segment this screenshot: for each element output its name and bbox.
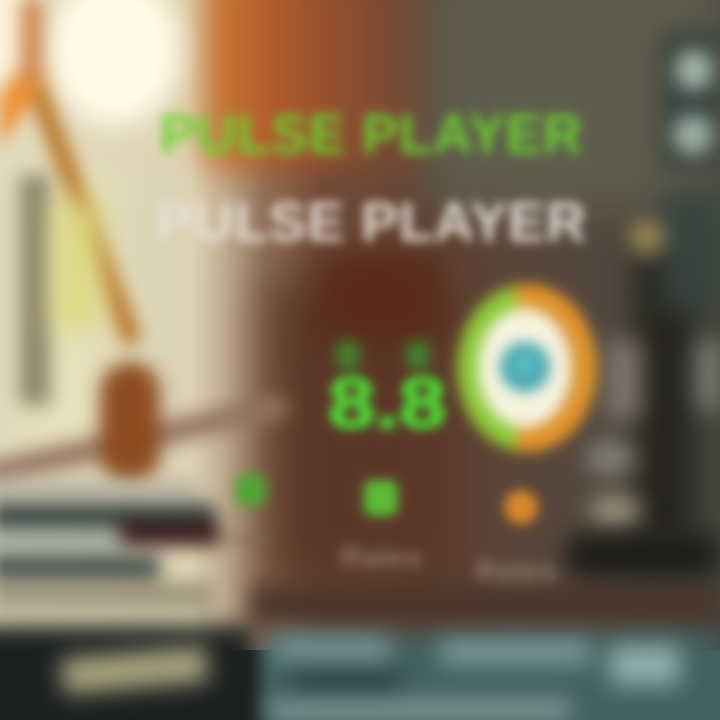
right side: dark green mid area bbox=[660, 190, 720, 310]
donut: white inner bbox=[478, 308, 572, 428]
big green score: 8.8 bbox=[328, 364, 446, 444]
book: dark teal bbox=[0, 504, 215, 528]
book: dark lower bbox=[0, 556, 160, 578]
window frame: green tint bbox=[55, 200, 100, 330]
book: pale top bbox=[0, 480, 200, 500]
right side: dark scale figure bbox=[635, 250, 695, 540]
stat 1: label: Legal bbox=[225, 530, 267, 547]
highlight: bottom fold bbox=[270, 700, 570, 720]
foreground: cloth highlights bbox=[258, 622, 694, 720]
background: sunlight glare bbox=[50, 0, 180, 125]
donut: light centre spot bbox=[514, 354, 536, 376]
right side: dark base bbox=[565, 532, 720, 578]
heading: green title: PULSE PLAYER bbox=[160, 102, 583, 165]
right side: lower window dot bbox=[673, 115, 713, 155]
background: bottom base band bbox=[0, 650, 720, 720]
stat 1: green marker bbox=[236, 474, 266, 506]
stat 2: green marker bbox=[364, 480, 398, 516]
right side: window panel bbox=[660, 30, 720, 170]
highlight: dark crease bbox=[290, 672, 400, 692]
highlight: centre fold bbox=[440, 640, 590, 664]
stat 2: label: Rates bbox=[340, 541, 422, 574]
background: dark central wood bbox=[270, 280, 460, 590]
window frame: grey post bbox=[20, 175, 50, 405]
book stack bbox=[0, 466, 233, 618]
foreground: pale paper bbox=[61, 646, 208, 694]
heading: white subtitle: PULSE PLAYER bbox=[155, 190, 587, 253]
right side: ornament base bbox=[590, 495, 640, 527]
right side: lamp highlight bbox=[630, 220, 664, 254]
book: pale middle bbox=[0, 532, 120, 552]
stat 3: orange marker bbox=[504, 490, 538, 524]
donut: base ring bbox=[469, 296, 585, 440]
highlight: right fold bbox=[610, 645, 680, 685]
background: red-brown panel behind headings bbox=[320, 250, 440, 340]
highlight: left fold bbox=[275, 638, 390, 660]
foreground: wood shelf bbox=[250, 585, 720, 625]
book: maroon shadow bbox=[120, 520, 220, 546]
foreground: teal cloth bbox=[265, 632, 720, 720]
right side: pale column bbox=[606, 340, 640, 420]
green score marks bbox=[338, 342, 428, 368]
donut: green arc bbox=[469, 297, 517, 439]
right side: upper window dot bbox=[675, 50, 713, 90]
background: top left pale glow bbox=[0, 0, 20, 80]
gavel handle bbox=[0, 393, 289, 487]
donut: teal centre bbox=[500, 342, 550, 392]
background: orange curtain bbox=[205, 0, 445, 170]
gavel head bbox=[100, 362, 160, 484]
right side: pale ornament bbox=[585, 440, 635, 476]
stat 3: label: Rates bbox=[475, 555, 557, 588]
book: pale lower bbox=[0, 582, 215, 608]
foreground: dark lower band bbox=[0, 625, 255, 720]
background: grey upper wall bbox=[430, 0, 720, 210]
right side: pale edge bbox=[698, 340, 720, 410]
background: pale window column bbox=[0, 170, 185, 460]
donut chart bbox=[446, 274, 607, 462]
